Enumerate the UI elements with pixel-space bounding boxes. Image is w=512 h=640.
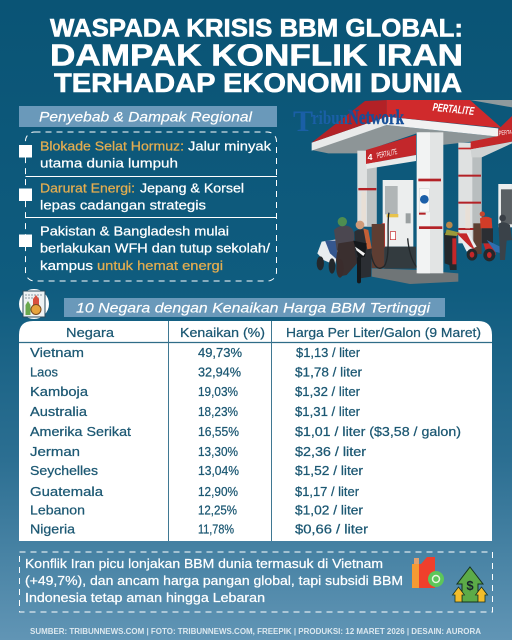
table rows: 49,73% — [198, 346, 242, 360]
table rows: 11,78% — [198, 522, 234, 536]
table rows: $2,36 / liter — [295, 445, 366, 459]
bullet 1: utama dunia lumpuh — [40, 156, 178, 170]
canopy: PERTALITE — [432, 102, 475, 118]
table rows: 32,94% — [198, 366, 241, 380]
table rows: Vietnam — [30, 345, 84, 360]
section heading: top 10 table — [64, 298, 445, 317]
canopy — [312, 100, 512, 153]
icon: fuel can — [412, 557, 444, 588]
table rows: 16,55% — [198, 425, 239, 439]
bullet 1: Blokade Selat Hormuz: — [40, 138, 184, 154]
left column: PERTALITE — [376, 147, 398, 160]
table rows — [30, 345, 461, 536]
table rows: 13,04% — [198, 464, 239, 478]
watermark logo: T — [293, 105, 313, 138]
illustration: fuel station — [312, 100, 512, 284]
icon: price chart — [19, 289, 49, 319]
icon: money arrows: $ — [466, 578, 474, 593]
footer credits: SUMBER: TRIBUNNEWS.COM | FOTO: TRIBUNNEWS.COM, FREEPIK | PRODUKSI: 12 MARET 2026 | DESAIN: AURORA — [30, 627, 481, 636]
table header: Negara — [66, 325, 115, 340]
bullet 2: lepas cadangan strategis — [40, 198, 207, 212]
table rows: 13,30% — [198, 445, 238, 459]
table rows: 12,90% — [198, 485, 238, 499]
table rows: $1,02 / liter — [295, 504, 363, 518]
table rows: $1,31 / liter — [295, 405, 360, 419]
bullet 2: Jepang & Korsel — [140, 180, 244, 196]
bullet 1 — [19, 138, 272, 170]
panel: summary callout — [20, 552, 492, 612]
table rows: Jerman — [30, 444, 80, 459]
table rows: 19,03% — [198, 385, 238, 399]
back column and canopy — [458, 133, 512, 243]
table rows: Lebanon — [30, 502, 85, 518]
left column — [357, 135, 416, 227]
riders and motorcycles — [317, 211, 512, 283]
table rows: Amerika Serikat — [30, 424, 131, 439]
table rows: 12,25% — [198, 504, 237, 518]
title — [50, 14, 463, 98]
title: DAMPAK KONFLIK IRAN — [50, 38, 463, 72]
table rows: Australia — [30, 404, 88, 419]
platform — [372, 268, 458, 284]
table rows: $1,78 / liter — [295, 366, 362, 380]
panel: summary callout: Indonesia tetap aman hingga Lebaran — [25, 590, 265, 605]
table rows: $1,13 / liter — [296, 346, 360, 360]
icon: money arrows — [452, 567, 488, 602]
watermark logo: Network — [348, 105, 404, 129]
panel: summary callout: Konflik Iran picu lonjakan BBM dunia termasuk di Vietnam — [25, 556, 383, 571]
table rows: $1,17 / liter — [295, 485, 359, 499]
bullet 3: berlakukan WFH dan tutup sekolah/ — [40, 240, 270, 256]
table rows: Guatemala — [30, 484, 104, 499]
table header — [66, 325, 481, 340]
section heading — [19, 106, 277, 127]
bullet 1: Jalur minyak — [188, 138, 272, 154]
panel: summary callout: (+49,7%), dan ancam harga pangan global, tapi subsidi BBM — [25, 573, 403, 588]
table rows: Kamboja — [30, 384, 89, 399]
bullet 3 — [19, 224, 270, 273]
watermark logo — [293, 105, 404, 138]
table rows: $0,66 / liter — [295, 522, 368, 536]
table header: Kenaikan (%) — [180, 325, 265, 340]
table rows: 18,23% — [198, 405, 238, 419]
section heading: Penyebab & Dampak Regional — [39, 108, 253, 124]
table rows: $1,01 / liter ($3,58 / galon) — [295, 425, 461, 439]
table header: Harga Per Liter/Galon (9 Maret) — [286, 325, 481, 340]
panel: causes and regional impact — [19, 106, 277, 281]
section heading: top 10 table: 10 Negara dengan Kenaikan Harga BBM Tertinggi — [76, 300, 431, 316]
watermark logo: ribun — [312, 108, 348, 129]
bullet 3: kampus — [40, 258, 94, 273]
bullet 3: Pakistan & Bangladesh mulai — [40, 224, 229, 238]
title: WASPADA KRISIS BBM GLOBAL: — [50, 14, 463, 42]
table rows: $1,32 / liter — [295, 385, 360, 399]
table rows: Nigeria — [30, 522, 76, 536]
table rows: Seychelles — [30, 463, 99, 478]
bullet 2 — [19, 180, 244, 212]
bullet 2: Darurat Energi: — [40, 180, 135, 196]
far right dispenser — [498, 184, 512, 227]
table rows: Laos — [30, 364, 58, 380]
title: TERHADAP EKONOMI DUNIA — [54, 68, 462, 98]
bullet 3: untuk hemat energi — [97, 258, 223, 273]
fuel pump — [371, 180, 419, 269]
main column — [417, 132, 443, 273]
table: fuel price increases — [19, 321, 492, 541]
left column: 4 — [368, 152, 373, 162]
table rows: $1,52 / liter — [295, 464, 363, 478]
